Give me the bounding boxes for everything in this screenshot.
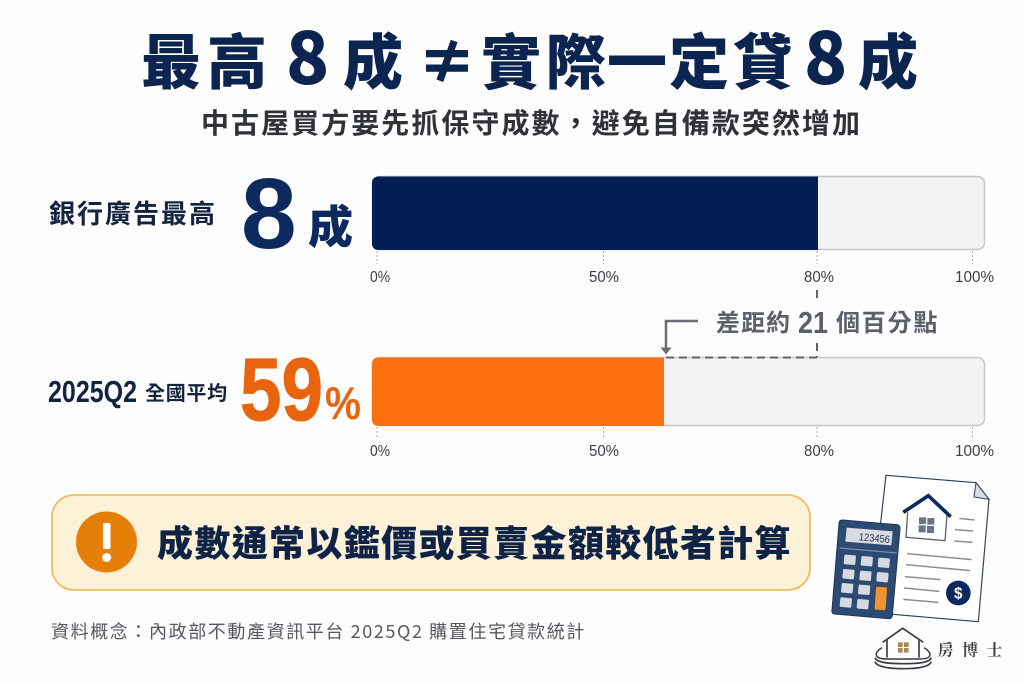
bar chart: 80% — [372, 176, 984, 250]
big value: 8 成 — [241, 158, 353, 270]
axis: bottom bar — [370, 427, 994, 460]
source note: 資料概念：內政部不動產資訊平台 2025Q2 購置住宅貸款統計 — [51, 618, 586, 644]
title: 最高 8 成 ≠ 實際一定貸 8 成 — [141, 3, 918, 105]
axis: bottom bar: 100% — [955, 443, 994, 460]
axis: top bar: 80% — [804, 269, 834, 286]
icon: calculator: 123456 — [858, 531, 890, 546]
row label: 銀行廣告最高 — [49, 194, 217, 231]
row label — [48, 374, 228, 409]
gap label: 差距約 — [716, 303, 791, 338]
axis: top bar — [370, 251, 994, 286]
gap label: 21 — [798, 305, 828, 340]
axis: top bar: 100% — [955, 269, 994, 286]
callout text: 成數通常以鑑價或買賣金額較低者計算 — [157, 515, 792, 567]
icon: calculator — [832, 520, 900, 619]
axis: bottom bar: 80% — [804, 443, 834, 460]
axis: bottom bar: 50% — [589, 443, 619, 460]
row: 2025Q2 national average — [48, 339, 994, 460]
gap arrow — [660, 321, 698, 354]
illustration: loan document and calculator — [832, 475, 1011, 669]
big value: 59%: % — [325, 377, 361, 429]
row label: 全國平均 — [145, 377, 228, 406]
gap label: 個百分點 — [836, 303, 939, 338]
gap annotation — [660, 290, 939, 358]
icon: warning — [76, 512, 137, 572]
big value: 8 成: 8 — [241, 158, 297, 270]
axis: bottom bar: 0% — [370, 443, 390, 460]
icon: document — [880, 475, 989, 622]
big value: 8 成: 成 — [308, 191, 353, 256]
axis: top bar: 50% — [589, 269, 619, 286]
axis: top bar: 0% — [370, 269, 390, 286]
gap label — [716, 303, 939, 340]
row: bank advertised maximum — [49, 158, 994, 286]
callout — [52, 495, 810, 590]
icon: document: $ — [954, 586, 963, 603]
bar chart: 59% — [372, 358, 984, 426]
big value: 59%: 59 — [240, 339, 323, 439]
subtitle: 中古屋買方要先抓保守成數，避免自備款突然增加 — [201, 102, 862, 142]
gap dashed connector — [664, 290, 817, 358]
row label: 2025Q2 — [48, 374, 137, 409]
logo: 房博士 — [875, 628, 1011, 669]
logo: 房博士: 房博士 — [938, 639, 1011, 661]
